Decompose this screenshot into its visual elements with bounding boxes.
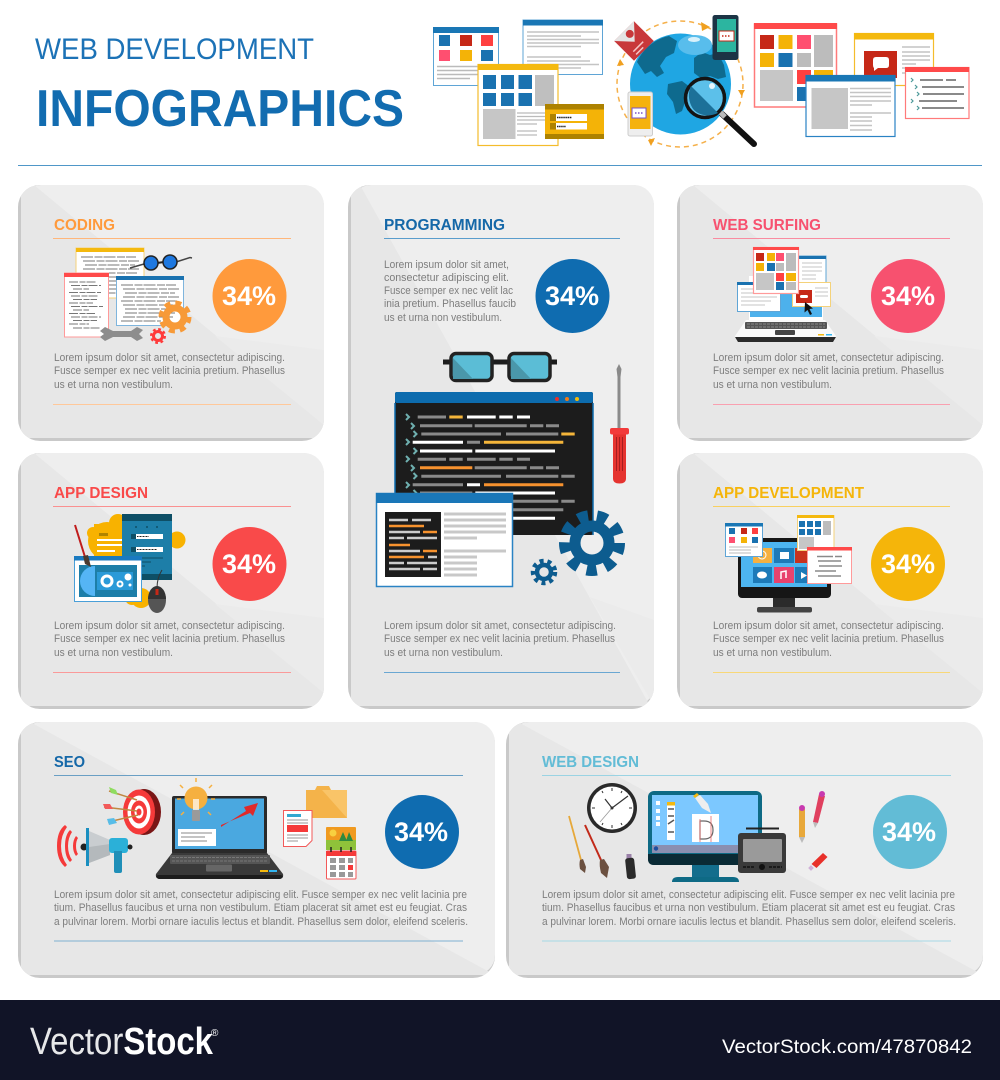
icon: target with arrows: [103, 787, 161, 835]
percentage circle: 34%: [222, 549, 276, 579]
body text: Lorem ipsum dolor sit amet, consectetur adipiscing.: [713, 352, 944, 364]
heading: SEO: [54, 754, 85, 771]
icon: paint brushes: [569, 816, 609, 878]
heading: WEB DESIGN: [542, 754, 639, 771]
logo: VectorStock: [30, 1021, 214, 1063]
body text: Lorem ipsum dolor sit amet, consectetur adipiscing elit. Fusce semper ex nec velit lacinia pre: [542, 889, 955, 901]
intro text: Lorem ipsum dolor sit amet,: [384, 259, 509, 271]
icon: pencils and USB: [799, 791, 828, 871]
window: red code: [905, 67, 969, 118]
card background: [506, 722, 983, 978]
body text: tium. Phasellus faucibus et urna non vestibulum. Etiam placerat sit amet est eu feugiat. Cras: [54, 902, 467, 914]
globe: [630, 34, 731, 134]
login card: [545, 104, 604, 139]
phone: dark: [712, 15, 738, 60]
percentage circle: [385, 795, 459, 869]
body text: Fusce semper ex nec velit lacinia pretium. Phasellus: [384, 633, 615, 645]
body text: Lorem ipsum dolor sit amet, consectetur adipiscing.: [384, 620, 616, 632]
body text: Lorem ipsum dolor sit amet, consectetur adipiscing elit. Fusce semper ex nec velit lacinia pre: [54, 889, 467, 901]
percentage circle: 34%: [222, 281, 276, 311]
body text: Lorem ipsum dolor sit amet, consectetur adipiscing.: [713, 620, 944, 632]
body text: [542, 889, 956, 928]
icon: large gear: [565, 516, 619, 570]
body text: us et urna non vestibulum.: [713, 647, 832, 659]
heading: WEB SURFING: [713, 217, 821, 234]
magnifying glass: [686, 78, 754, 144]
window: red grid: [754, 23, 837, 107]
percentage circle: [212, 259, 286, 333]
body text: us et urna non vestibulum.: [713, 379, 832, 391]
icon: screwdriver: [610, 364, 629, 484]
code editor window: [395, 392, 593, 535]
percentage circle: 34%: [545, 281, 599, 311]
window: blue article: [806, 75, 896, 136]
window: yellow chat: [854, 33, 934, 86]
envelope: [614, 21, 654, 61]
body text: [713, 352, 944, 391]
body text: [713, 620, 944, 659]
window: yellow grid: [478, 64, 558, 146]
code lines: [406, 414, 575, 518]
percentage circle: [536, 259, 610, 333]
body text: a pulvinar lorem. Morbi ornare iaculis lectus et blandit. Phasellus sem dolor, eleifend sceleris.: [542, 916, 956, 928]
icon: megaphone with sound waves: [57, 825, 132, 873]
icon: light bulb: [177, 778, 215, 821]
body text: us et urna non vestibulum.: [54, 647, 173, 659]
header illustration: web windows and globe: [433, 15, 969, 147]
dashed orbit arrows: [617, 21, 745, 147]
phone: light: [628, 92, 652, 136]
intro text: [384, 259, 516, 324]
body text: Fusce semper ex nec velit lacinia pretium. Phasellus: [54, 365, 285, 377]
intro text: consectetur adipiscing elit.: [384, 272, 509, 284]
body text: a pulvinar lorem. Morbi ornare iaculis lectus et blandit. Phasellus sem dolor, eleifend sceleris.: [54, 916, 468, 928]
header divider: [18, 164, 982, 166]
body text: Lorem ipsum dolor sit amet, consectetur adipiscing.: [54, 620, 285, 632]
registered mark: ®: [211, 1028, 219, 1039]
panel: web surfing: [677, 185, 983, 441]
title: [35, 33, 404, 138]
window: blue grid: [433, 27, 499, 86]
panel: app development: [677, 453, 983, 709]
percentage circle: [871, 527, 945, 601]
front window: [376, 493, 513, 586]
percentage circle: 34%: [394, 817, 448, 847]
panel: seo: [18, 722, 495, 978]
body text: Fusce semper ex nec velit lacinia pretium. Phasellus: [713, 633, 944, 645]
percentage circle: 34%: [882, 817, 936, 847]
heading: APP DESIGN: [54, 485, 148, 502]
icon: monitor with design app: [648, 791, 762, 882]
window: text page: [523, 20, 603, 74]
icon: document: [284, 810, 312, 846]
body text: [54, 352, 285, 391]
body text: tium. Phasellus faucibus et urna non vestibulum. Etiam placerat sit amet est eu feugiat. Cras: [542, 902, 955, 914]
icon: picture and calendar: [326, 827, 356, 879]
percentage circle: [873, 795, 947, 869]
percentage circle: 34%: [881, 281, 935, 311]
panel: programming: [348, 185, 654, 709]
body text: [54, 620, 285, 659]
card background: [18, 453, 324, 709]
card background: [677, 185, 983, 441]
illustration: monitor with apps: [725, 515, 852, 612]
card background: [18, 185, 324, 441]
icon: USB stick: [625, 854, 636, 879]
footer: watermark bar: [0, 1000, 1000, 1080]
body text: [54, 889, 468, 928]
illustration: app screens: [74, 514, 186, 613]
image id: VectorStock.com/47870842: [722, 1037, 972, 1058]
icon: glasses: [443, 354, 557, 380]
intro text: us et urna non vestibulum.: [384, 312, 502, 324]
icon: laptop with chart: [156, 796, 283, 879]
body text: Lorem ipsum dolor sit amet, consectetur adipiscing.: [54, 352, 285, 364]
percentage circle: [212, 527, 286, 601]
title: INFOGRAPHICS: [36, 80, 404, 138]
heading: PROGRAMMING: [384, 217, 505, 234]
percentage circle: 34%: [881, 549, 935, 579]
icon: small gear: [533, 561, 555, 583]
body text: us et urna non vestibulum.: [384, 647, 503, 659]
icon: wall clock: [587, 783, 637, 833]
body text: [384, 620, 616, 659]
heading: APP DEVELOPMENT: [713, 485, 864, 502]
title: WEB DEVELOPMENT: [35, 33, 314, 66]
intro text: inia pretium. Phasellus faucib: [384, 298, 516, 310]
icon: drawing tablet: [738, 828, 786, 873]
body text: us et urna non vestibulum.: [54, 379, 173, 391]
intro text: Fusce semper ex nec velit lac: [384, 285, 513, 297]
card background: [348, 185, 654, 709]
panel: web design: [506, 722, 983, 978]
card background: [18, 722, 495, 978]
card background: [677, 453, 983, 709]
percentage circle: [871, 259, 945, 333]
panel: app design: [18, 453, 324, 709]
icon: folder: [306, 786, 347, 818]
heading: CODING: [54, 217, 115, 234]
illustration: code windows, glasses, gears: [64, 248, 192, 342]
illustration: laptop with windows: [735, 247, 836, 342]
panel: coding: [18, 185, 324, 441]
body text: Fusce semper ex nec velit lacinia pretium. Phasellus: [713, 365, 944, 377]
body text: Fusce semper ex nec velit lacinia pretium. Phasellus: [54, 633, 285, 645]
